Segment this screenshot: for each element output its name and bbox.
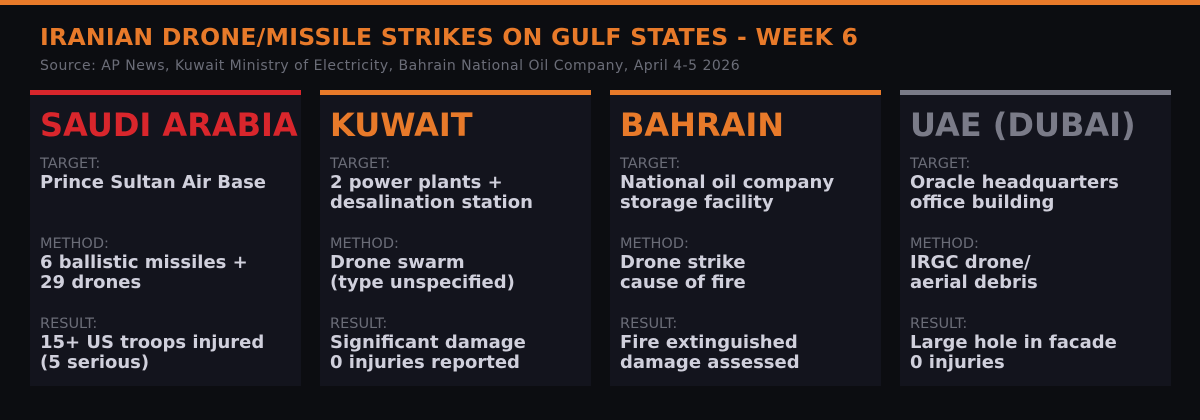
result: Significant damage: [330, 332, 526, 353]
result: [330, 316, 526, 373]
result: 0 injuries reported: [330, 352, 520, 373]
result: [620, 316, 800, 373]
target: storage facility: [620, 192, 774, 213]
target: Oracle headquarters: [910, 172, 1119, 193]
target: [330, 156, 533, 213]
result: Large hole in facade: [910, 332, 1117, 353]
method: METHOD:: [40, 236, 109, 252]
panel: uae: [900, 90, 1171, 386]
result: [40, 316, 264, 373]
panel: bahrain: [610, 90, 881, 386]
method: aerial debris: [910, 272, 1038, 293]
method: [910, 236, 1038, 293]
result: RESULT:: [620, 316, 677, 332]
target: 2 power plants +: [330, 172, 503, 193]
method: IRGC drone/: [910, 252, 1031, 273]
method: [40, 236, 248, 293]
target: National oil company: [620, 172, 834, 193]
method: METHOD:: [330, 236, 399, 252]
target: office building: [910, 192, 1054, 213]
target: TARGET:: [620, 156, 680, 172]
result: 15+ US troops injured: [40, 332, 264, 353]
method: 6 ballistic missiles +: [40, 252, 248, 273]
method: METHOD:: [910, 236, 979, 252]
heading: kuwait: KUWAIT: [330, 106, 473, 144]
target: [620, 156, 834, 213]
subtitle: Source: AP News, Kuwait Ministry of Electricity, Bahrain National Oil Company, April 4-5 2026: [40, 58, 740, 74]
result: damage assessed: [620, 352, 800, 373]
method: [330, 236, 515, 293]
result: RESULT:: [910, 316, 967, 332]
result: 0 injuries: [910, 352, 1005, 373]
panel: saudi arabia: [30, 90, 301, 386]
panel: kuwait: [320, 90, 591, 386]
target: TARGET:: [330, 156, 390, 172]
result: RESULT:: [330, 316, 387, 332]
result: RESULT:: [40, 316, 97, 332]
target: TARGET:: [910, 156, 970, 172]
title: IRANIAN DRONE/MISSILE STRIKES ON GULF STATES - WEEK 6: [40, 23, 858, 51]
method: (type unspecified): [330, 272, 515, 293]
target: [40, 156, 266, 193]
method: METHOD:: [620, 236, 689, 252]
heading: bahrain: BAHRAIN: [620, 106, 784, 144]
method: cause of fire: [620, 272, 746, 293]
result: (5 serious): [40, 352, 149, 373]
target: TARGET:: [40, 156, 100, 172]
method: [620, 236, 746, 293]
target: desalination station: [330, 192, 533, 213]
method: Drone swarm: [330, 252, 465, 273]
result: Fire extinguished: [620, 332, 798, 353]
method: 29 drones: [40, 272, 141, 293]
target: Prince Sultan Air Base: [40, 172, 266, 193]
target: [910, 156, 1119, 213]
result: [910, 316, 1117, 373]
heading: saudi arabia: SAUDI ARABIA: [40, 106, 298, 144]
heading: uae: UAE (DUBAI): [910, 106, 1136, 144]
method: Drone strike: [620, 252, 746, 273]
